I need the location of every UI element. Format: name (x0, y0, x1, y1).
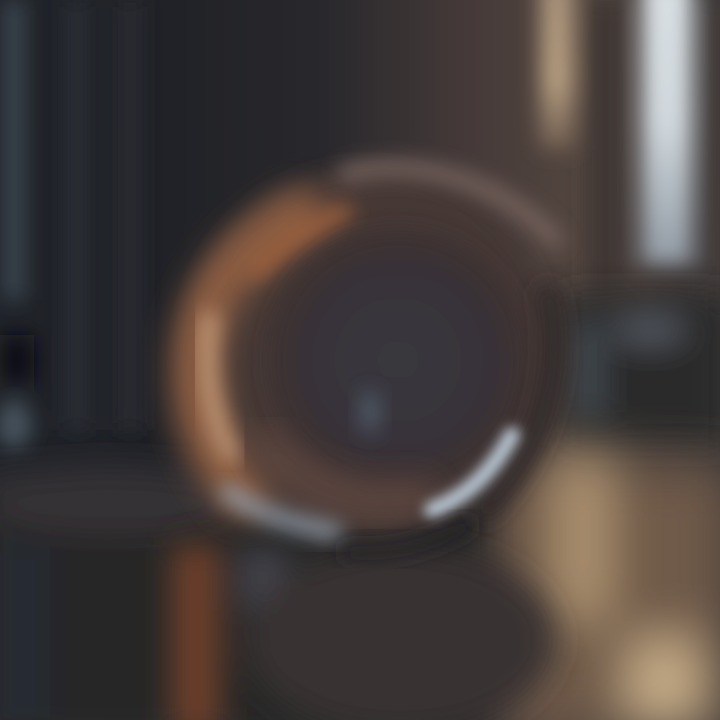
ring: orange left edge (195, 215, 300, 495)
ring: hot orange highlight (255, 212, 345, 272)
ring: glass body (184, 168, 555, 554)
table surface (0, 466, 500, 720)
ring: dark right rim (485, 295, 554, 510)
ring: bright glow (207, 320, 232, 455)
ring: blue-white lower left highlight (228, 492, 335, 532)
ring: blue-white lower right highlight (432, 435, 512, 510)
ring: lower warm body (265, 445, 420, 501)
floor reflections, lower right (500, 450, 720, 720)
right mid band (560, 295, 720, 445)
left vertical window streaks (0, 0, 142, 450)
right background: bright window strips (540, 0, 720, 300)
orange reflection on table (172, 545, 555, 720)
ring: pale top rim (345, 168, 555, 240)
ring: inner dark lens (268, 230, 528, 490)
ring: lens center glint (359, 390, 381, 434)
ring: dark base contact (345, 524, 470, 554)
